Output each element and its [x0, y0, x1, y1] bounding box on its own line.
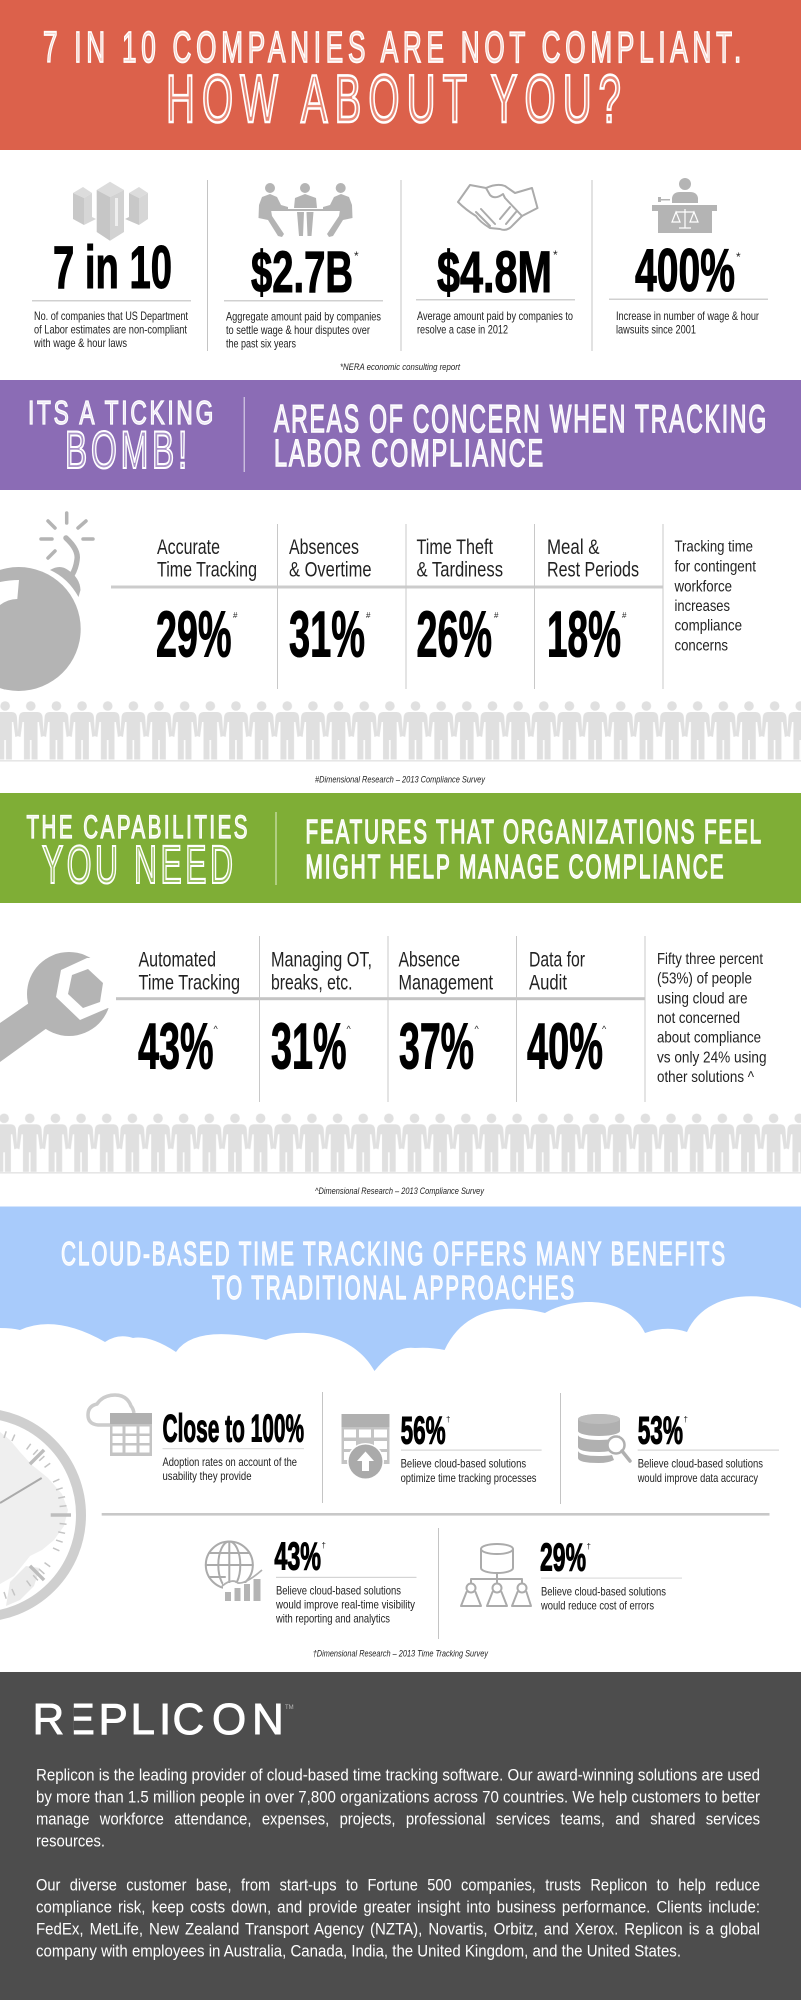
side note: concerns [674, 638, 728, 655]
metric: managing OT, breaks: Managing OT, [271, 949, 372, 972]
benefit: close to 100% [88, 1395, 304, 1483]
side note: vs only 24% using [657, 1049, 766, 1066]
panel: cloud benefit items [88, 1392, 779, 1660]
big number: 400% [635, 237, 735, 304]
description [33, 309, 189, 350]
metric: time theft and tardiness: # [494, 611, 499, 620]
description: to settle wage & hour disputes over [226, 323, 370, 337]
metric: accurate time tracking: # [233, 611, 238, 620]
metric: absences and overtime: # [366, 611, 371, 620]
metric: absence management: 37% [399, 1010, 474, 1083]
metric: meal and rest periods [547, 536, 639, 671]
description: the past six years [226, 336, 296, 350]
footnote: †Dimensional Research – 2013 Time Tracking Survey [313, 1649, 489, 1660]
metric: accurate time tracking: Accurate [157, 536, 220, 559]
footnote: #Dimensional Research – 2013 Compliance Survey [315, 774, 486, 785]
metric: absences and overtime: & Overtime [289, 559, 372, 582]
stat: $4.8M [416, 185, 575, 336]
description: No. of companies that US Department [34, 309, 189, 323]
people row [0, 1112, 801, 1174]
description: Believe cloud-based solutions [541, 1585, 666, 1599]
metric: data for audit [527, 949, 607, 1083]
description: would improve data accuracy [637, 1471, 758, 1485]
metric: accurate time tracking: Time Tracking [157, 559, 257, 582]
description [417, 309, 573, 336]
benefit: 43%: † [322, 1541, 326, 1550]
company description: resources. [36, 1833, 105, 1851]
panel: title banner [0, 0, 801, 150]
metric: time theft and tardiness: 26% [416, 598, 492, 671]
panel: concern metrics table [111, 524, 756, 689]
description: Believe cloud-based solutions [638, 1457, 763, 1471]
metric: meal and rest periods: Rest Periods [547, 559, 639, 582]
panel: cloud benefits header: TO TRADITIONAL APPROACHES [212, 1269, 576, 1306]
side note: other solutions ^ [657, 1069, 754, 1086]
metric: automated time tracking: Automated [138, 949, 216, 972]
description: lawsuits since 2001 [616, 322, 696, 336]
metric: time theft and tardiness: & Tardiness [416, 559, 503, 582]
metric: absences and overtime: Absences [289, 536, 359, 559]
panel: capabilities banner: YOU NEED [42, 835, 236, 895]
metric: managing OT, breaks: breaks, etc. [271, 971, 352, 994]
panel: ticking bomb banner [0, 380, 801, 490]
metric: meal and rest periods: # [622, 611, 627, 620]
footnote: *NERA economic consulting report [340, 362, 460, 373]
metric: data for audit: Data for [529, 949, 585, 972]
icon: office buildings [73, 182, 148, 241]
metric: absence management: ^ [474, 1024, 480, 1034]
icon: people at table [258, 183, 352, 237]
description: Aggregate amount paid by companies [226, 310, 381, 324]
metric: managing OT, breaks: ^ [346, 1024, 352, 1034]
panel: capability metrics table [116, 936, 766, 1102]
panel: key statistics [32, 178, 768, 373]
benefit: 29%: † [586, 1542, 591, 1551]
side note: about compliance [657, 1030, 761, 1047]
description [540, 1585, 666, 1613]
description [162, 1455, 297, 1483]
metric: absences and overtime [289, 536, 372, 671]
stat heading: 29% [540, 1537, 586, 1580]
metric: time theft and tardiness [416, 536, 503, 671]
benefit: 53% [578, 1409, 779, 1485]
panel: company footer [0, 1672, 801, 2000]
stat: 7 in 10 [32, 182, 191, 350]
metric: accurate time tracking: 29% [156, 598, 232, 671]
side note [657, 951, 766, 1086]
benefit: 53%: † [684, 1415, 688, 1424]
icon: bomb [0, 513, 93, 691]
big number: $2.7B [251, 240, 353, 305]
metric: absences and overtime: 31% [289, 598, 365, 671]
banner left heading: THE CAPABILITIES [26, 809, 250, 845]
metric: automated time tracking: ^ [214, 1024, 218, 1034]
description [226, 310, 381, 350]
icon: calendar upload [342, 1414, 390, 1480]
metric: managing OT, breaks [271, 949, 372, 1083]
side note: workforce [674, 578, 732, 595]
description: resolve a case in 2012 [417, 322, 508, 336]
icon: judge at bench [652, 178, 717, 233]
description: would improve real-time visibility [275, 1597, 415, 1611]
side note: (53%) of people [657, 971, 752, 988]
description [637, 1457, 763, 1485]
footnote: ^Dimensional Research – 2013 Compliance Survey [315, 1186, 485, 1197]
description: usability they provide [162, 1469, 252, 1483]
company description [36, 1767, 760, 1961]
benefit: 43% [206, 1535, 416, 1625]
icon: handshake [458, 185, 538, 230]
icon: clock with map [0, 1413, 81, 1617]
big number: $4.8M [437, 240, 552, 305]
metric: time theft and tardiness: Time Theft [416, 536, 493, 559]
benefit: 56%: † [446, 1415, 450, 1424]
description [401, 1457, 536, 1485]
description: with reporting and analytics [275, 1611, 390, 1625]
logo: Replicon: TM [285, 1705, 294, 1711]
description: of Labor estimates are non-compliant [34, 322, 188, 336]
stat: 400%: * [736, 250, 741, 264]
side note: compliance [674, 618, 742, 635]
metric: managing OT, breaks: 31% [271, 1010, 346, 1083]
people row [0, 700, 801, 762]
description: Adoption rates on account of the [162, 1455, 297, 1469]
side note: Tracking time [674, 539, 753, 556]
icon: wrench [0, 952, 130, 1062]
stat: 400% [609, 178, 768, 336]
benefit: 29% [461, 1537, 682, 1613]
side note: for contingent [674, 559, 756, 576]
metric: absence management: Absence [398, 949, 460, 972]
description: Believe cloud-based solutions [276, 1583, 401, 1597]
panel: cloud benefits header [0, 1206, 801, 1390]
description: with wage & hour laws [33, 336, 127, 350]
description: optimize time tracking processes [401, 1471, 536, 1485]
metric: meal and rest periods: Meal & [547, 536, 600, 559]
metric: meal and rest periods: 18% [547, 598, 621, 671]
side note [674, 539, 756, 655]
stat: $4.8M: * [553, 248, 558, 262]
description: Average amount paid by companies to [417, 309, 573, 323]
logo: Replicon: REPLICON [32, 1695, 284, 1744]
icon: database search [578, 1414, 630, 1463]
side note: Fifty three percent [657, 951, 763, 968]
side note: increases [674, 598, 730, 615]
description: would reduce cost of errors [540, 1599, 654, 1613]
metric: automated time tracking [138, 949, 240, 1083]
metric: data for audit: Audit [529, 971, 567, 994]
stat heading: 56% [401, 1409, 446, 1452]
stat: $2.7B: * [354, 249, 359, 263]
description [616, 309, 759, 336]
metric: absence management [398, 949, 493, 1083]
company description: company with employees in Australia, Canada, India, the United Kingdom, and the United States. [36, 1943, 681, 1961]
big number: 7 in 10 [53, 234, 172, 301]
side note: not concerned [657, 1010, 740, 1027]
banner left heading: ITS A TICKING [28, 394, 216, 431]
metric: data for audit: ^ [602, 1024, 607, 1034]
panel: ticking bomb banner: LABOR COMPLIANCE [274, 433, 545, 475]
icon: globe with chart [206, 1542, 263, 1601]
benefit: 56% [342, 1409, 542, 1485]
metric: accurate time tracking [156, 536, 257, 671]
metric: automated time tracking: Time Tracking [138, 971, 240, 994]
stat heading: Close to 100% [162, 1408, 304, 1451]
stat: $2.7B [224, 183, 383, 350]
panel: ticking bomb banner: BOMB! [65, 421, 191, 480]
description: Believe cloud-based solutions [401, 1457, 526, 1471]
description [275, 1583, 415, 1625]
icon: cloud calendar [88, 1395, 152, 1456]
stat heading: 43% [274, 1535, 321, 1578]
stat heading: 53% [638, 1409, 683, 1452]
description: Increase in number of wage & hour [616, 309, 759, 323]
side note: using cloud are [657, 990, 748, 1007]
white clouds [0, 1296, 801, 1390]
metric: automated time tracking: 43% [138, 1010, 214, 1083]
icon: database org chart [461, 1544, 531, 1606]
metric: absence management: Management [398, 971, 493, 994]
metric: data for audit: 40% [527, 1010, 603, 1083]
panel: capabilities banner [0, 793, 801, 903]
